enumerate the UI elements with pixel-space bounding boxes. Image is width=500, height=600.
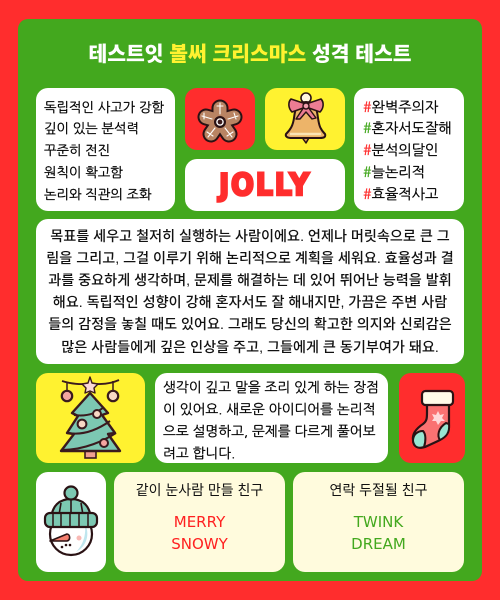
panel: description paragraph: 림을 그리고, 그걸 이루기 위해 논리적으로 계획을 세워요. 효율성과 결: [46, 250, 454, 266]
panel: traits list: 깊이 있는 분석력: [44, 122, 139, 135]
title: 테스트잇 볼써 크리스마스 성격 테스트: [88, 37, 412, 67]
heading: friend 2: 연락 두절될 친구: [330, 482, 427, 498]
panel: friend card 2: [293, 472, 464, 572]
panel: hashtags: #효율적사고: [363, 188, 438, 202]
text: MERRY SNOWY: [171, 513, 228, 553]
icon: gingerbread cookie: [198, 100, 242, 142]
panel: description paragraph: 과를 중요하게 생각하며, 문제를 해결하는 데 있어 뛰어난 능력을 발휘: [48, 272, 452, 288]
panel: traits list: 독립적인 사고가 강함: [44, 101, 164, 114]
panel: description paragraph: 목표를 세우고 철저히 실행하는 사람이에요. 언제나 머릿속으로 큰 그: [50, 228, 450, 244]
panel: snowman: [36, 472, 106, 572]
panel: hashtags: #완벽주의자: [363, 101, 438, 115]
text: TWINK DREAM: [351, 513, 406, 553]
panel: hashtags: #혼자서도잘해: [363, 122, 452, 136]
icon: snowman head: [44, 485, 98, 556]
panel: hashtags: [354, 88, 464, 211]
panel: strengths text: [155, 373, 388, 463]
panel: traits list: [36, 88, 175, 211]
icon: stocking: [412, 390, 454, 449]
panel: cookie: [185, 88, 255, 150]
panel: description paragraph: [36, 219, 464, 364]
panel: traits list: 논리와 직관의 조화: [44, 188, 151, 201]
panel: strengths text: 으로 설명하고, 문제를 다르게 풀어보: [163, 424, 375, 438]
panel: traits list: 꾸준히 전진: [44, 144, 110, 157]
panel: strengths text: 생각이 깊고 말을 조리 있게 하는 장점: [163, 380, 379, 394]
panel: traits list: 원칙이 확고함: [44, 166, 123, 179]
panel: hashtags: #늘논리적: [363, 166, 425, 180]
text: MERRY SNOWY: MERRY: [174, 513, 225, 531]
text: TWINK DREAM: DREAM: [351, 535, 406, 553]
panel: stocking: [399, 373, 465, 463]
panel: description paragraph: 많은 사람들에게 깊은 인상을 주고, 그들에게 큰 동기부여가 돼요.: [61, 339, 439, 355]
heading: friend 1: 같이 눈사람 만들 친구: [136, 482, 263, 498]
heading: JOLLY: JOLLY: [219, 168, 311, 203]
panel: strengths text: 이 있어요. 새로운 아이디어를 논리적: [163, 402, 375, 416]
panel: hashtags: #분석의달인: [363, 144, 438, 158]
icon: bell: [284, 92, 326, 144]
panel: strengths text: 려고 합니다.: [163, 446, 235, 460]
icon: christmas tree: [60, 376, 122, 459]
text: TWINK DREAM: TWINK: [354, 513, 403, 531]
panel: result name: [185, 159, 345, 211]
panel: friend card 1: [114, 472, 285, 572]
text: MERRY SNOWY: SNOWY: [171, 535, 228, 553]
panel: tree: [36, 373, 145, 463]
panel: description paragraph: 들의 감정을 놓칠 때도 있어요. 그래도 당신의 확고한 의지와 신뢰감은: [48, 316, 452, 332]
panel: bell: [265, 88, 345, 150]
panel: description paragraph: 해요. 독립적인 성향이 강해 혼자서도 잘 해내지만, 가끔은 주변 사람: [53, 294, 447, 310]
